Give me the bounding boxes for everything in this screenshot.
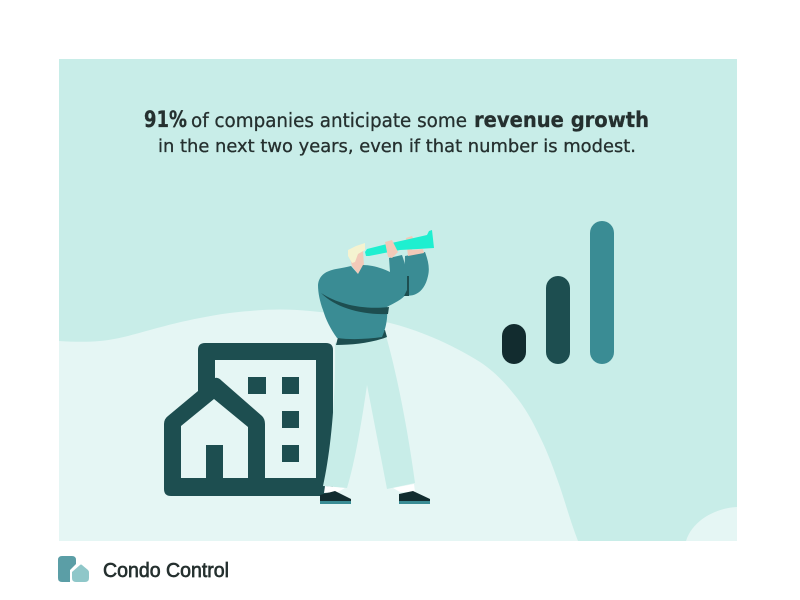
icon: building and house [164,343,333,496]
bar: medium [546,276,570,364]
telescope [365,230,434,256]
hill [59,310,578,541]
socks [324,484,415,493]
far hand [406,236,424,256]
hair [348,243,365,263]
shoe right [399,491,430,504]
bar: tall [590,221,614,364]
headline line 1: revenue growth: revenue growth [474,108,649,133]
sweater [318,255,408,339]
logo wordmark: Condo Control [103,559,229,582]
windows [248,377,299,462]
arm fold [404,276,409,296]
belt [336,330,387,345]
headline line 1: middle: of companies anticipate some [191,109,467,132]
trousers [323,336,415,489]
logo [58,556,229,582]
near hand [385,240,398,258]
corner hill [686,507,737,541]
back arm [404,252,429,296]
figure: person with telescope [318,230,434,504]
logo mark [58,556,89,582]
headline line 1: 91%: 91% [144,108,187,133]
headline [144,108,649,157]
bar: short [502,324,526,364]
panel: background [59,59,737,541]
headline line 2: in the next two years, even if that number is modest. [158,137,636,157]
face [350,250,364,274]
shoe left [320,491,351,504]
bar chart [502,221,614,364]
sweater fold [321,293,389,314]
